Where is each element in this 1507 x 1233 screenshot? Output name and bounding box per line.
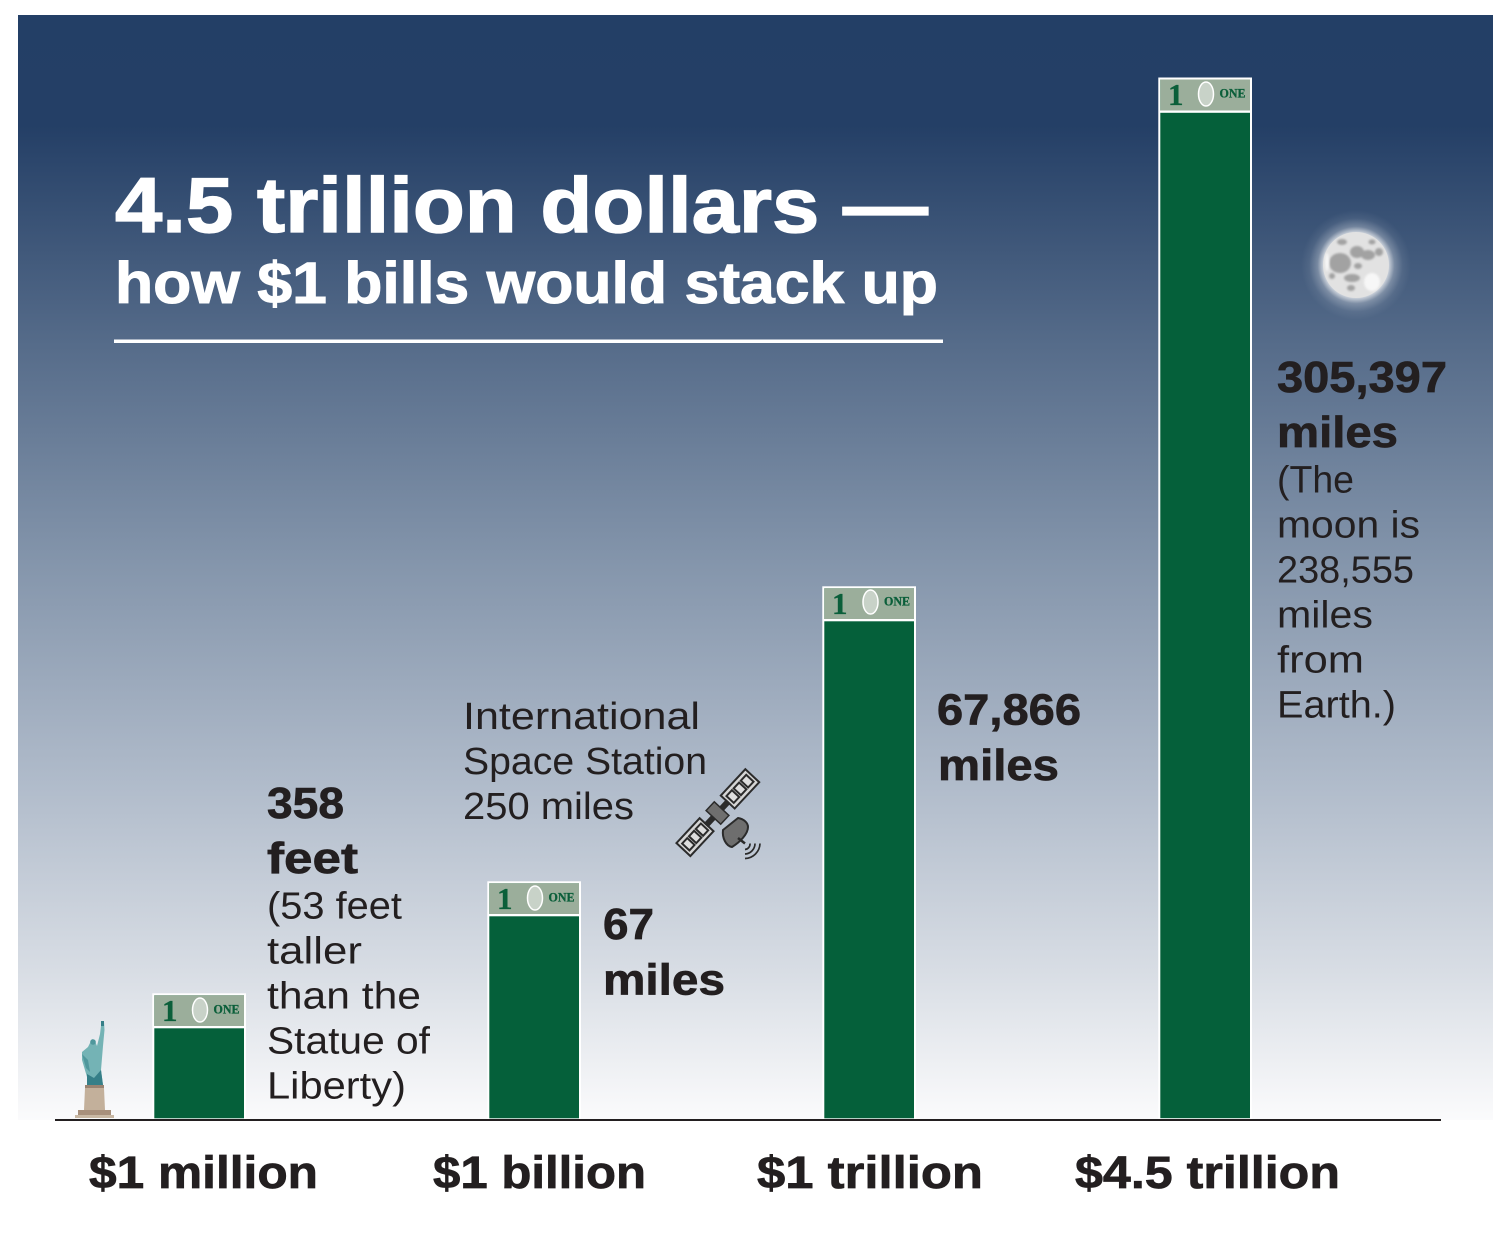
icon: satellite <box>676 769 760 858</box>
bill header: 1 <box>832 586 848 621</box>
label: 305,397 miles: Earth.) <box>1277 684 1396 726</box>
label: 358 feet: than the <box>267 976 421 1018</box>
label: 67,866 miles: 67,866 <box>937 686 1081 734</box>
title: 4.5 trillion dollars — <box>115 161 928 249</box>
label: 305,397 miles: miles <box>1277 594 1373 636</box>
bill header <box>823 586 915 621</box>
label: 305,397 miles: (The <box>1277 460 1354 502</box>
axis label: $1 billion: $1 billion <box>433 1147 646 1198</box>
satellite dish <box>723 818 748 847</box>
label: 305,397 miles: from <box>1277 640 1364 682</box>
right solar panel <box>721 769 759 809</box>
bar: $1 million <box>153 993 245 1119</box>
label: 358 feet: (53 feet <box>267 886 402 928</box>
label: 67 miles: miles <box>603 956 725 1004</box>
label: International Space Station: Space Station <box>463 741 707 783</box>
bill header: ONE <box>1220 86 1246 100</box>
satellite body <box>705 801 729 826</box>
label: 305,397 miles: moon is <box>1277 504 1420 546</box>
axis label: $4.5 trillion: $4.5 trillion <box>1075 1147 1340 1198</box>
icon: Statue of Liberty <box>75 1021 114 1118</box>
dish stem <box>738 838 745 844</box>
label: 305,397 miles: miles <box>1277 408 1398 457</box>
bill header <box>153 993 245 1028</box>
label: 358 feet <box>267 779 430 1108</box>
bill header <box>1159 77 1251 113</box>
bill header: ONE <box>214 1002 240 1016</box>
label: 358 feet: feet <box>267 834 358 883</box>
bill header: 1 <box>162 993 178 1028</box>
bill header: 1 <box>1168 77 1184 112</box>
label: 358 feet: Liberty) <box>267 1066 406 1108</box>
label: 67 miles: 67 <box>603 900 654 949</box>
title: how $1 bills would stack up <box>115 251 938 316</box>
label: 305,397 miles: 238,555 <box>1277 550 1414 592</box>
label: 358 feet: Statue of <box>267 1020 430 1062</box>
bill header: ONE <box>548 890 574 904</box>
label: 67,866 miles <box>937 686 1081 790</box>
title underline <box>114 340 943 343</box>
label: 305,397 miles: 305,397 <box>1277 353 1447 402</box>
bill header: 1 <box>497 881 512 916</box>
label: 358 feet: taller <box>267 930 362 972</box>
axis label: $1 trillion: $1 trillion <box>757 1147 983 1198</box>
left solar panel <box>676 818 714 856</box>
label: 67 miles <box>603 900 725 1004</box>
bar: $1 trillion <box>823 586 915 1119</box>
label: International Space Station: International <box>463 696 700 738</box>
label: 67,866 miles: miles <box>938 741 1059 790</box>
icon: moon <box>1301 210 1411 320</box>
label: International Space Station: 250 miles <box>463 786 634 828</box>
label: 305,397 miles <box>1277 353 1447 726</box>
baseline axis <box>55 1119 1441 1121</box>
bill header <box>488 881 580 916</box>
label: International Space Station <box>463 696 707 828</box>
bar: $4.5 trillion <box>1159 77 1251 1119</box>
title <box>115 161 938 316</box>
label: 358 feet: 358 <box>267 779 344 828</box>
bar: $1 billion <box>488 881 580 1119</box>
axis label: $1 million: $1 million <box>89 1147 318 1198</box>
signal waves <box>745 844 760 858</box>
bill header: ONE <box>884 594 910 608</box>
